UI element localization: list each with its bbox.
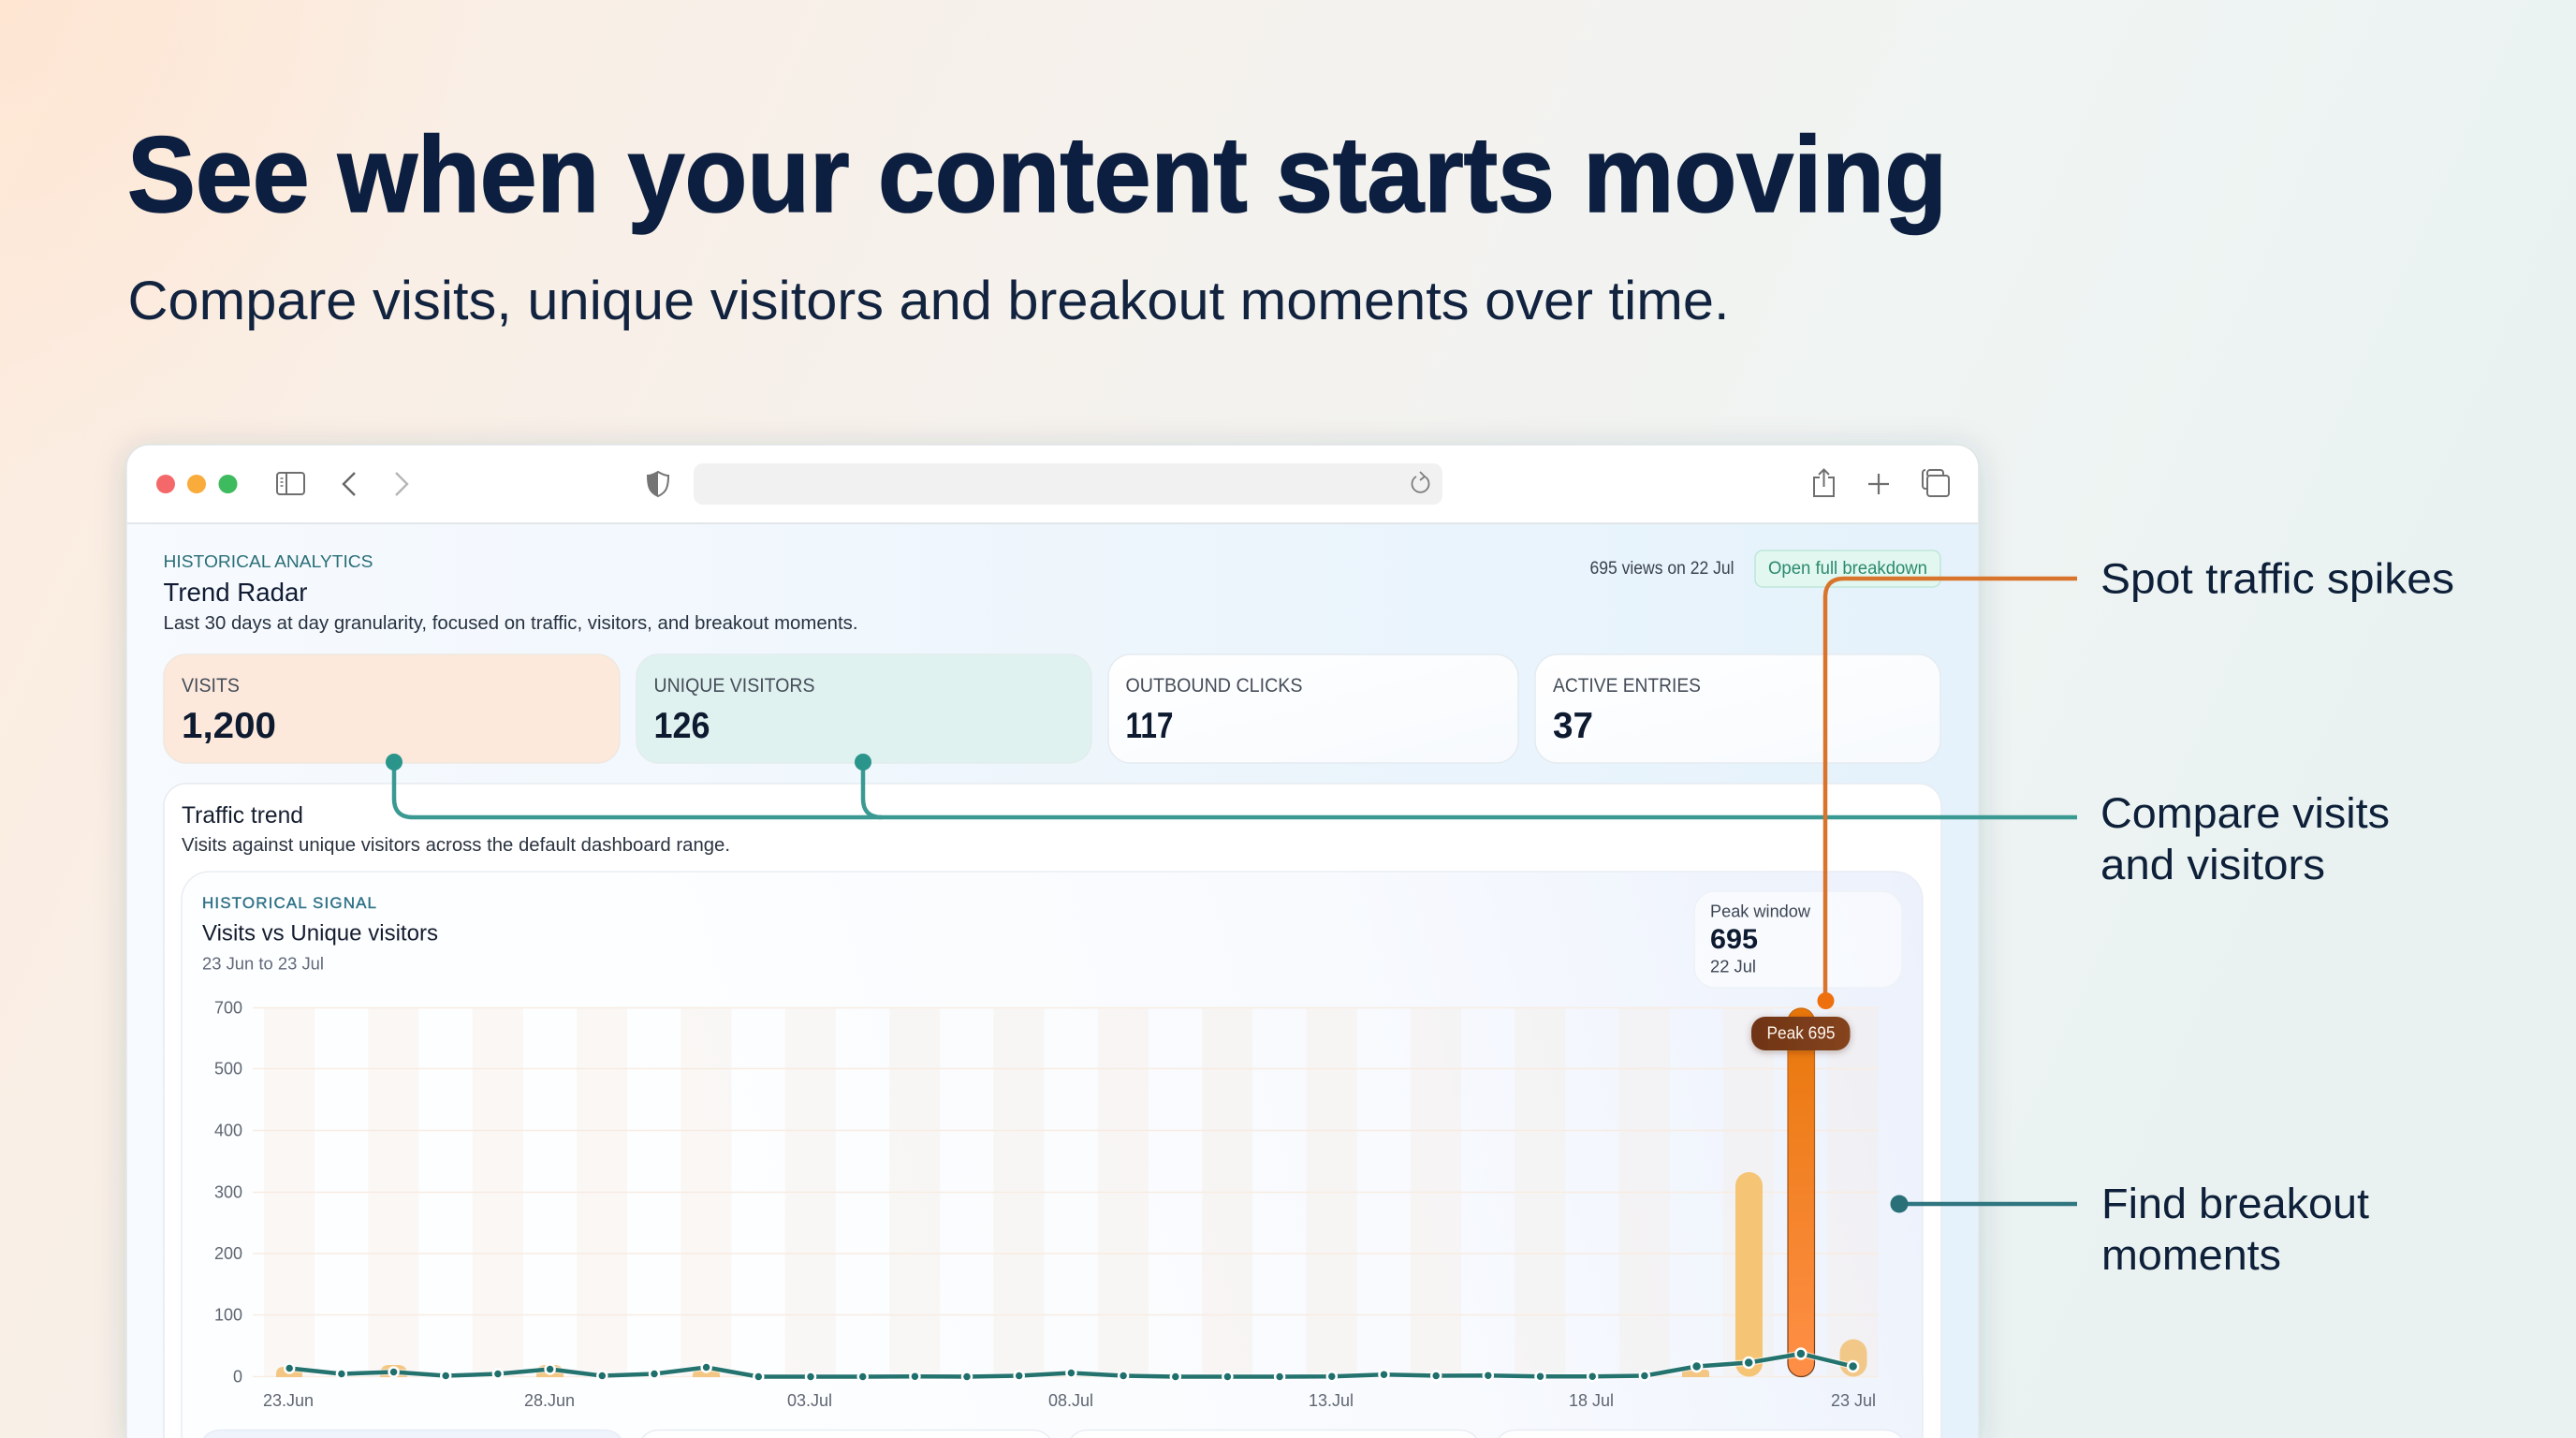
address bar [694,463,1442,505]
callout label: find breakout moments [2101,1180,2370,1279]
card: active entries [1535,654,1940,763]
card: peak window [1694,891,1902,988]
chart: visits bars and unique visitors line [214,998,1879,1410]
button: open full breakdown: Open full breakdown [1768,559,1927,579]
x axis labels [263,1391,1876,1410]
callout connector: compare visits and visitors [386,754,2077,817]
eyebrow: historical signal: HISTORICAL SIGNAL [202,894,376,912]
callout label: compare visits and visitors: and visitors [2100,841,2325,888]
inner panel background [182,872,1923,1438]
description: Visits against unique visitors across the default dashboard range. [182,835,730,856]
y axis labels: 100 [214,1305,242,1324]
icon: forward chevron [396,473,407,495]
callout label: compare visits and visitors [2100,789,2390,888]
date range: 23 Jun to 23 Jul [202,955,324,974]
icon: tabs [1923,470,1949,496]
icon: back chevron [344,473,355,495]
description: Last 30 days at day granularity, focused on traffic, visitors, and breakout moments. [163,613,857,634]
callout connector: find breakout moments [1891,1195,2077,1213]
tooltip: peak 695 [1751,1017,1850,1050]
callout label: compare visits and visitors: Compare visits [2100,789,2390,837]
panel: traffic trend [164,784,1941,1438]
horizontal grid lines [253,1007,1879,1376]
card: active entries: 37 [1553,706,1593,746]
toolbar [156,463,1949,505]
panel: browser window [126,445,1979,1438]
y axis labels: 200 [214,1244,242,1263]
bottom stat cards [202,1431,1903,1438]
icon: sidebar toggle [277,473,304,494]
card: visits: VISITS [182,675,240,697]
callout connector: spot traffic spikes [1818,579,2077,1009]
eyebrow: historical analytics: HISTORICAL ANALYTICS [163,552,373,571]
KPI cards [164,654,1940,763]
x axis labels: 23 Jul [1831,1391,1876,1410]
icon: reload [1412,472,1428,492]
x axis labels: 08.Jul [1048,1391,1093,1410]
card: visits: 1,200 [182,706,276,746]
tooltip: peak 695: Peak 695 [1767,1024,1835,1043]
card: peak window: 695 [1710,924,1758,955]
callout label: find breakout moments: Find breakout [2101,1180,2370,1227]
heading: trend radar: Trend Radar [163,578,307,607]
title: See when your content starts moving [127,115,1947,235]
card: peak window: Peak window [1710,902,1811,921]
panel background [164,784,1941,1438]
card: unique visitors [637,654,1091,763]
y axis labels: 700 [214,998,242,1017]
x axis labels: 13.Jul [1309,1391,1354,1410]
card: outbound clicks [1108,654,1518,763]
icon: window controls [156,475,238,493]
bar: visits 21 Jul [1735,1172,1763,1376]
card: unique visitors: UNIQUE VISITORS [653,675,814,697]
unique visitors line [289,1354,1853,1376]
card: visits [164,654,620,763]
y axis labels: 300 [214,1183,242,1202]
x axis labels: 03.Jul [787,1391,832,1410]
small visit bars [276,1365,1709,1377]
card: outbound clicks: 117 [1125,706,1174,746]
bar: peak visits 22 Jul [1788,1008,1814,1376]
subtitle: Compare visits, unique visitors and breakout moments over time. [127,271,1730,331]
x axis labels: 18 Jul [1569,1391,1614,1410]
chart title: Visits vs Unique visitors [202,921,438,946]
line data points [285,1348,1858,1382]
x axis labels: 23.Jun [263,1391,314,1410]
dashboard header [163,550,1940,634]
heading: traffic trend: Traffic trend [182,802,303,829]
content area [127,523,1978,1438]
callout label: find breakout moments: moments [2101,1231,2281,1279]
bar: visits 23 Jul [1840,1339,1866,1376]
card: unique visitors: 126 [653,706,710,746]
views note: 695 views on 22 Jul [1589,559,1734,579]
y axis labels: 400 [214,1122,242,1140]
panel: historical signal chart [182,872,1923,1438]
y axis labels: 500 [214,1060,242,1078]
browser frame [126,445,1979,1438]
button: open full breakdown [1755,550,1940,587]
callout label: spot traffic spikes: Spot traffic spikes [2100,554,2454,603]
x axis labels: 28.Jun [524,1391,575,1410]
alternating day bands [264,1008,1878,1377]
y axis labels: 0 [233,1367,242,1386]
icon: new tab plus [1868,474,1889,494]
y axis labels [214,998,242,1386]
card: peak window: 22 Jul [1710,957,1756,976]
icon: share [1814,470,1834,496]
card: active entries: ACTIVE ENTRIES [1553,675,1701,697]
icon: privacy shield [648,472,668,496]
card: outbound clicks: OUTBOUND CLICKS [1125,675,1303,697]
